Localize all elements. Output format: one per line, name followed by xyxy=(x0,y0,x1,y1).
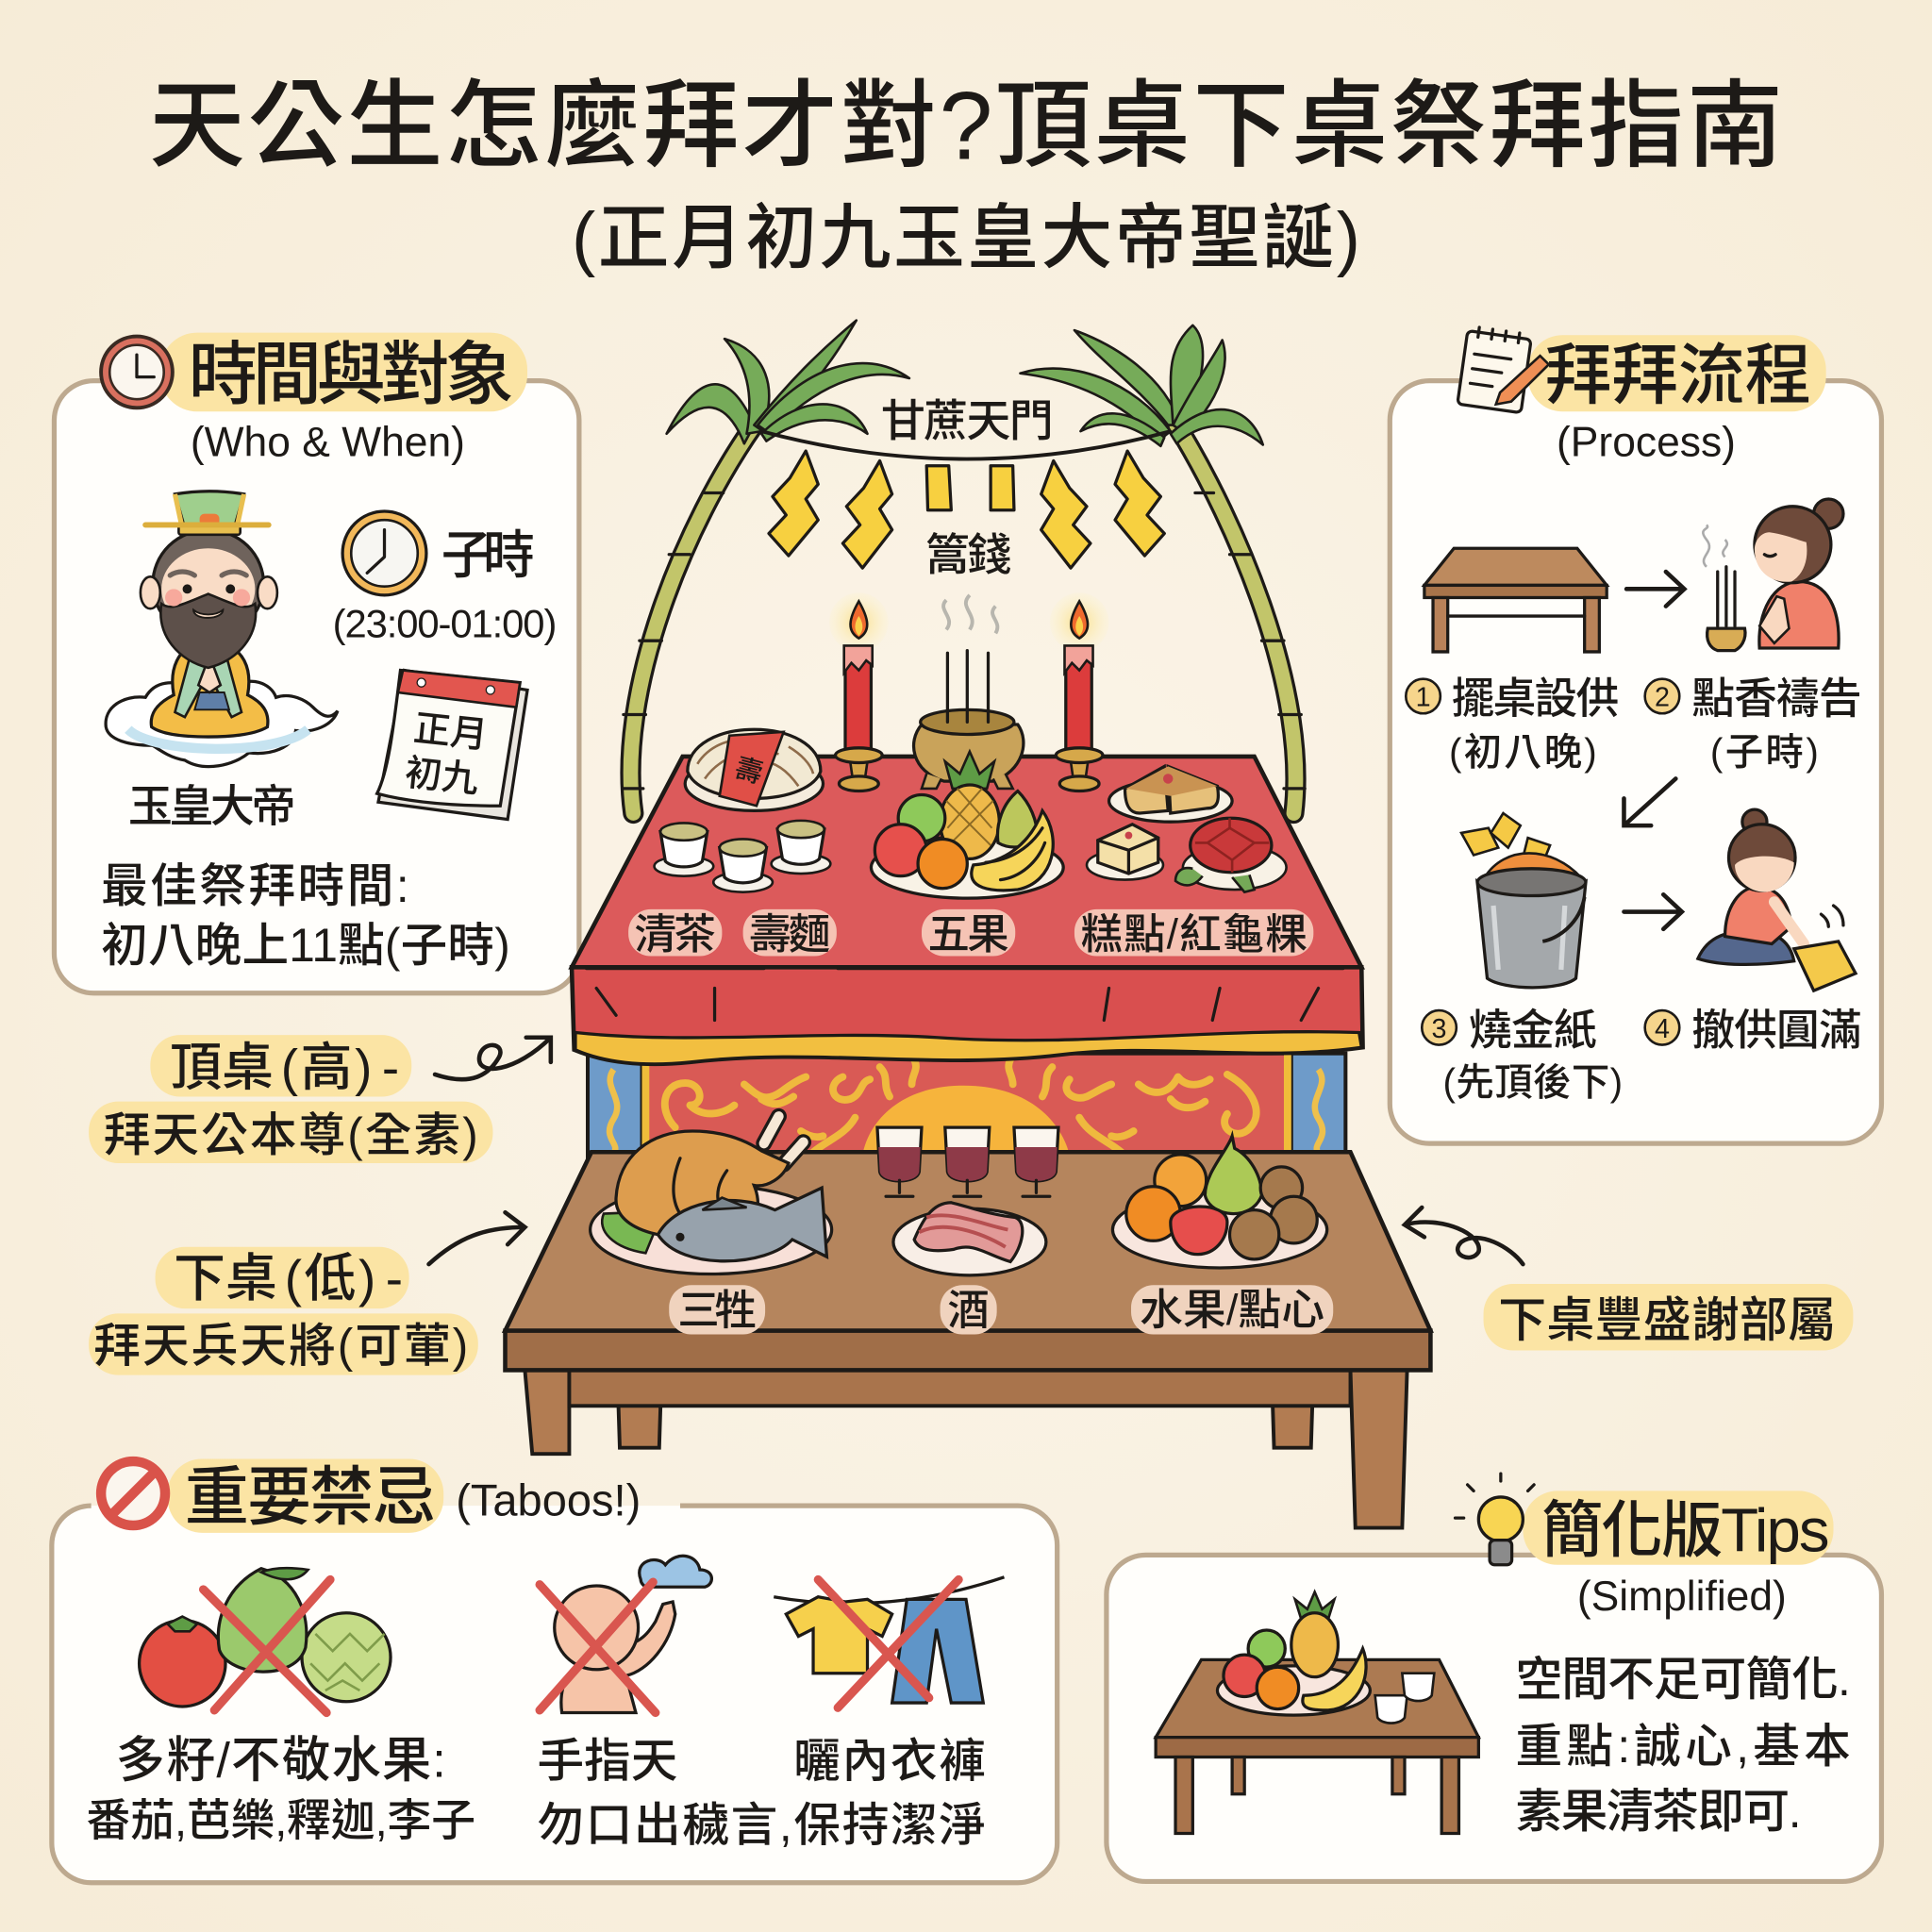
text: no underwear: 曬內衣褲 xyxy=(793,1734,986,1787)
table labels: 三牲 xyxy=(677,1288,757,1334)
table legs xyxy=(525,1370,1407,1528)
text: no pointing: 手指天 xyxy=(537,1734,677,1787)
icon: underwear on clothesline xyxy=(774,1577,1004,1707)
panel: taboos xyxy=(52,1458,1058,1883)
heading highlight xyxy=(160,333,527,411)
incense burner xyxy=(914,595,1024,789)
icon: incense burner xyxy=(1703,525,1745,651)
tea cups xyxy=(655,821,830,892)
callout: lower table: 下桌(低)- xyxy=(174,1249,403,1307)
callout: thanks to subordinates xyxy=(1405,1208,1853,1351)
noodles with longevity band xyxy=(685,729,823,810)
cloth labels xyxy=(628,909,1313,958)
table labels: 水果/點心 xyxy=(1140,1286,1324,1334)
icon: person praying xyxy=(1755,499,1843,648)
icon: pointing at sky xyxy=(540,1556,711,1713)
english subheading: (Who & When) xyxy=(191,419,465,465)
string xyxy=(761,431,1171,459)
text: tips: 素果清茶即可. xyxy=(1516,1785,1802,1838)
panel: taboos: 番茄,芭樂,釋迦,李子 xyxy=(86,1795,475,1845)
text: tips: 重點:誠心,基本 xyxy=(1516,1720,1851,1773)
callout: lower table xyxy=(89,1212,525,1375)
heading: 重要禁忌 xyxy=(185,1462,436,1533)
step 1 label: 1 xyxy=(1416,682,1431,712)
english subheading: (Simplified) xyxy=(1577,1574,1787,1620)
arrow: step 3 to 4 xyxy=(1624,894,1682,929)
heading highlight xyxy=(1528,335,1826,411)
icon: calendar xyxy=(377,671,527,820)
english subheading: (Process) xyxy=(1557,419,1736,465)
arrow: step 1 to 2 xyxy=(1626,572,1684,607)
left sugarcane xyxy=(623,321,909,813)
icon: calendar: 初九 xyxy=(403,753,480,801)
subtitle: (正月初九玉皇大帝聖誕) xyxy=(572,198,1360,278)
label: sugarcane heaven gate: 甘蔗天門 xyxy=(881,395,1054,445)
arrow: step 2 to 3 xyxy=(1624,778,1675,825)
lower table xyxy=(506,1116,1430,1528)
step 3 label: 3 xyxy=(1432,1014,1447,1044)
table labels xyxy=(669,1285,1333,1335)
table edge xyxy=(506,1331,1430,1370)
step 1 label xyxy=(1406,675,1619,774)
step 2 label xyxy=(1645,675,1862,774)
cloth drape xyxy=(572,967,1363,1064)
title: 天公生怎麼拜才對?頂桌下桌祭拜指南 xyxy=(149,72,1783,179)
cloth labels: 清茶 xyxy=(635,912,716,958)
icon: bucket burning paper xyxy=(1461,813,1586,988)
candle right xyxy=(1050,592,1109,791)
heading: 時間與對象 xyxy=(189,337,514,413)
icon: clock at zi hour xyxy=(342,511,426,595)
upper table with red cloth xyxy=(572,592,1363,1158)
icon: forbidden fruits xyxy=(140,1568,391,1713)
cake plate xyxy=(1109,766,1232,822)
arrow: to lower table from right xyxy=(1405,1208,1523,1264)
text: speech and purity: 勿口出穢言,保持潔淨 xyxy=(537,1798,986,1851)
calendar date text: 正月 xyxy=(411,708,490,757)
fruit and dessert plate xyxy=(1112,1136,1327,1268)
icon: red clock xyxy=(101,337,173,408)
callout: upper table: 拜天公本尊(全素) xyxy=(104,1108,478,1161)
step 1 label: (初八晚) xyxy=(1449,730,1597,774)
icon: prohibition sign xyxy=(101,1461,165,1525)
cloth labels: 糕點/紅龜粿 xyxy=(1080,912,1307,958)
step 4 label: 4 xyxy=(1655,1014,1670,1044)
table top xyxy=(506,1152,1430,1331)
callout: lower table: 拜天兵天將(可葷) xyxy=(93,1319,468,1372)
label: zi hour: 子時 xyxy=(441,525,535,584)
icon: simple table with fruit xyxy=(1156,1592,1478,1834)
callout: upper table: 頂桌(高)- xyxy=(170,1039,399,1097)
icon: person clearing offerings xyxy=(1698,809,1856,991)
step 3 label: 燒金紙 xyxy=(1469,1007,1597,1055)
red tortoise cake xyxy=(1175,818,1287,892)
five fruit plate xyxy=(871,752,1063,898)
panel: process xyxy=(1390,325,1881,1143)
step 3 label: (先頂後下) xyxy=(1442,1060,1623,1104)
arrow: to upper table xyxy=(435,1038,551,1079)
cloth labels: 壽麵 xyxy=(749,912,830,958)
step 4 label: 撤供圓滿 xyxy=(1691,1007,1862,1055)
callout: upper table xyxy=(89,1035,551,1163)
panel: who and when: 初八晚上11點(子時) xyxy=(101,919,510,972)
heading highlight xyxy=(1523,1491,1834,1565)
wine glasses xyxy=(877,1127,1058,1196)
square cake xyxy=(1087,824,1163,880)
text: no fruits: 多籽/不敬水果: xyxy=(116,1733,446,1788)
label: paper money: 篙錢 xyxy=(925,530,1011,580)
step 2 label: 2 xyxy=(1655,682,1670,712)
text: tips xyxy=(1516,1653,1851,1838)
chicken and fish plate xyxy=(591,1116,832,1274)
cloth labels: 五果 xyxy=(928,912,1009,958)
icon: notepad and pencil xyxy=(1457,325,1553,416)
english subheading: (Taboos!) xyxy=(456,1475,641,1525)
panel: simplified tips xyxy=(1107,1474,1881,1881)
paper money streamers xyxy=(769,451,1164,568)
icon: jade emperor on cloud xyxy=(106,491,338,767)
icon: table xyxy=(1424,548,1607,652)
heading: 簡化版Tips xyxy=(1541,1495,1830,1564)
text: best time: 最佳祭拜時間: xyxy=(101,859,409,912)
right sugarcane xyxy=(1020,325,1305,813)
sugarcane gate xyxy=(623,321,1305,813)
table apron xyxy=(569,1370,1351,1406)
pork plate xyxy=(893,1203,1046,1275)
step 3 label xyxy=(1422,1007,1623,1104)
step 2 label: 點香禱告 xyxy=(1691,675,1862,723)
cloth top xyxy=(572,757,1361,967)
heading: 拜拜流程 xyxy=(1545,338,1811,412)
callout: thanks to subordinates: 下桌豐盛謝部屬 xyxy=(1498,1293,1836,1347)
text: tips: 空間不足可簡化. xyxy=(1516,1653,1851,1706)
icon: light bulb xyxy=(1456,1474,1534,1565)
step 1 label: 擺桌設供 xyxy=(1452,675,1619,723)
heading highlight xyxy=(168,1458,443,1533)
panel: who and when xyxy=(54,333,579,993)
label: time range: (23:00-01:00) xyxy=(333,601,557,645)
label: jade emperor: 玉皇大帝 xyxy=(128,781,295,831)
step 2 label: (子時) xyxy=(1710,730,1819,774)
longevity character: 壽 xyxy=(732,754,766,790)
carved panel xyxy=(588,1054,1345,1158)
arrow: to lower table xyxy=(429,1212,525,1264)
candle left xyxy=(829,592,889,791)
table labels: 酒 xyxy=(947,1288,990,1334)
